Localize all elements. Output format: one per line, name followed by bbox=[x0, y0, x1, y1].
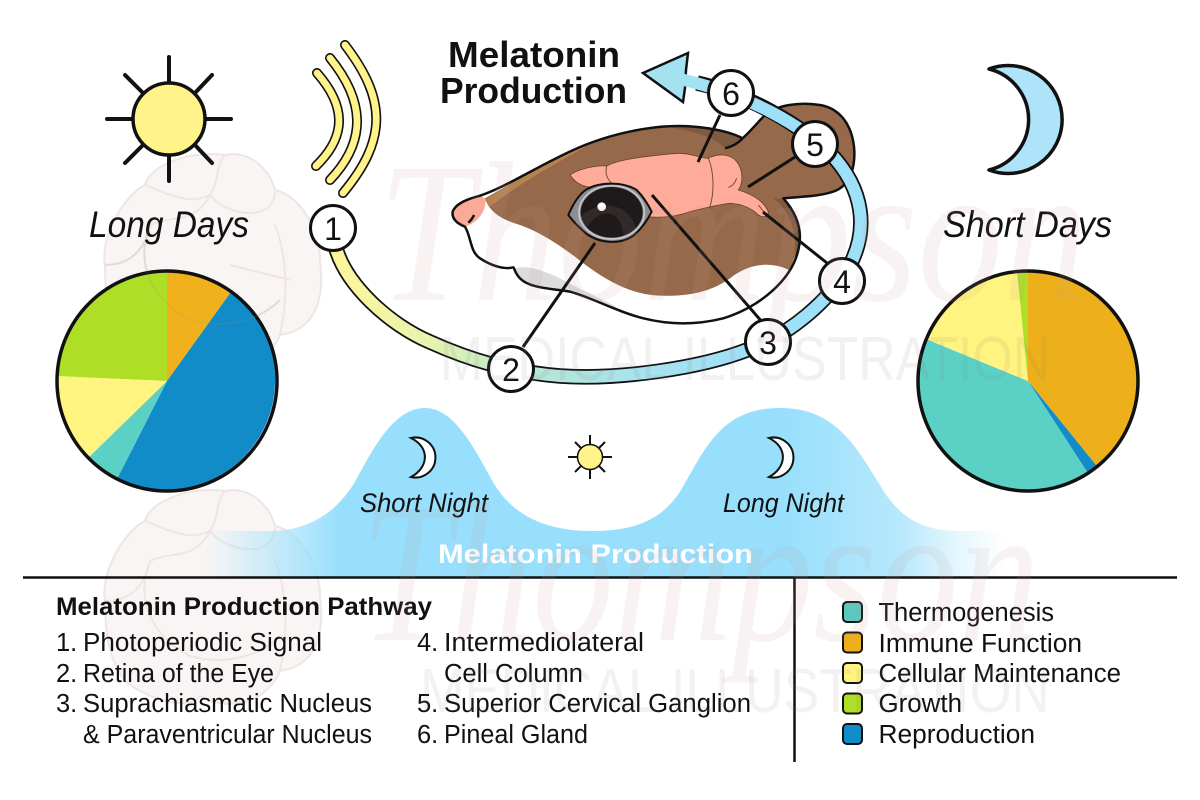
legend: reproduction: Reproduction bbox=[878, 721, 1035, 749]
pathway heading: Melatonin Production Pathway bbox=[56, 593, 432, 621]
pathway list, column two: Pineal Gland bbox=[444, 721, 588, 749]
pathway list, column one: 1. bbox=[56, 629, 77, 657]
icon: sun bbox=[107, 57, 231, 181]
watermark: script name, upper: Thompson bbox=[378, 123, 1088, 344]
watermark: subtitle, upper: MEDICAL ILLUSTRATION bbox=[440, 325, 1050, 394]
legend: growth: Growth bbox=[878, 690, 962, 718]
pathway arrow bbox=[335, 53, 861, 377]
pathway list, column one: 3. bbox=[56, 690, 77, 718]
nose bbox=[453, 196, 485, 227]
pie chart: short days bbox=[917, 271, 1138, 491]
brain folds bbox=[606, 158, 765, 213]
step 6 marker bbox=[708, 70, 754, 116]
pathway list, column one: Retina of the Eye bbox=[83, 660, 274, 688]
watermark bbox=[105, 123, 1088, 726]
eye bbox=[568, 184, 652, 242]
illustration: mouse head with brain and eye bbox=[453, 104, 854, 323]
icon: moon, short days bbox=[989, 66, 1062, 174]
pathway list, column two: 5. bbox=[417, 690, 438, 718]
pathway list, column two: Intermediolateral bbox=[444, 629, 644, 657]
brain bbox=[570, 153, 768, 217]
divider lines bbox=[23, 577, 1177, 762]
heading: melatonin production title: Melatonin bbox=[448, 34, 620, 75]
melatonin production wave chart bbox=[200, 408, 1010, 577]
legend: thermogenesis: Thermogenesis bbox=[878, 599, 1054, 627]
label: melatonin production: Melatonin Production bbox=[438, 539, 753, 569]
pathway list, column one: Suprachiasmatic Nucleus bbox=[83, 690, 372, 718]
legend: growth bbox=[843, 690, 962, 718]
step 2 marker: 2 bbox=[502, 352, 520, 388]
step 1 marker bbox=[310, 206, 356, 250]
step 6 marker: 6 bbox=[722, 76, 740, 112]
pathway list, column two: Cell Column bbox=[444, 660, 583, 688]
watermark: cell cluster lines over the pie bbox=[105, 225, 280, 324]
legend bbox=[843, 599, 1121, 749]
text block: melatonin production pathway bbox=[56, 593, 751, 749]
pathway list, column one: 2. bbox=[56, 660, 77, 688]
pathway list, column one: & Paraventricular Nucleus bbox=[83, 721, 372, 749]
pathway list, column two bbox=[417, 629, 751, 749]
icon: moon, short night bbox=[411, 437, 435, 477]
head base bbox=[453, 104, 854, 323]
watermark: cell cluster emblems, behind the artwork bbox=[104, 154, 321, 704]
legend: cellular maintenance: Cellular Maintenance bbox=[878, 660, 1121, 688]
label: long night: Long Night bbox=[723, 488, 845, 518]
heading: short days: Short Days bbox=[943, 204, 1112, 245]
heading: long days: Long Days bbox=[89, 204, 249, 245]
pie chart: long days bbox=[57, 271, 277, 491]
fur highlight bbox=[485, 140, 597, 207]
step 1 marker: 1 bbox=[324, 211, 342, 247]
watermark: subtitle, lower: MEDICAL ILLUSTRATION bbox=[420, 657, 1050, 726]
label: short night: Short Night bbox=[360, 488, 489, 518]
watermark: script name, lower: Thompson bbox=[360, 463, 1040, 684]
icon: small sun bbox=[568, 435, 612, 479]
icon: moon, long night bbox=[769, 438, 793, 477]
legend: immune function: Immune Function bbox=[878, 630, 1082, 658]
step 4 marker: 4 bbox=[833, 264, 851, 300]
pathway list, column one: Photoperiodic Signal bbox=[83, 629, 322, 657]
step 2 marker bbox=[488, 346, 534, 392]
pathway list, column one bbox=[56, 629, 372, 749]
leader lines bbox=[523, 115, 827, 347]
head outline bbox=[453, 104, 854, 323]
step 4 marker bbox=[820, 258, 864, 304]
mouth shadow bbox=[515, 267, 627, 313]
icon: light waves bbox=[316, 45, 376, 193]
pathway list, column two: 6. bbox=[417, 721, 438, 749]
heading: melatonin production title bbox=[440, 34, 627, 111]
pathway list, column two: Superior Cervical Ganglion bbox=[444, 690, 751, 718]
step 5 marker bbox=[792, 122, 838, 166]
step 3 marker: 3 bbox=[759, 325, 777, 361]
step 3 marker bbox=[746, 320, 790, 364]
fur shadow bbox=[663, 126, 800, 263]
step 5 marker: 5 bbox=[806, 127, 824, 163]
pathway list, column two: 4. bbox=[417, 629, 438, 657]
brown fur bbox=[485, 104, 854, 296]
heading: melatonin production title: Production bbox=[440, 70, 627, 111]
